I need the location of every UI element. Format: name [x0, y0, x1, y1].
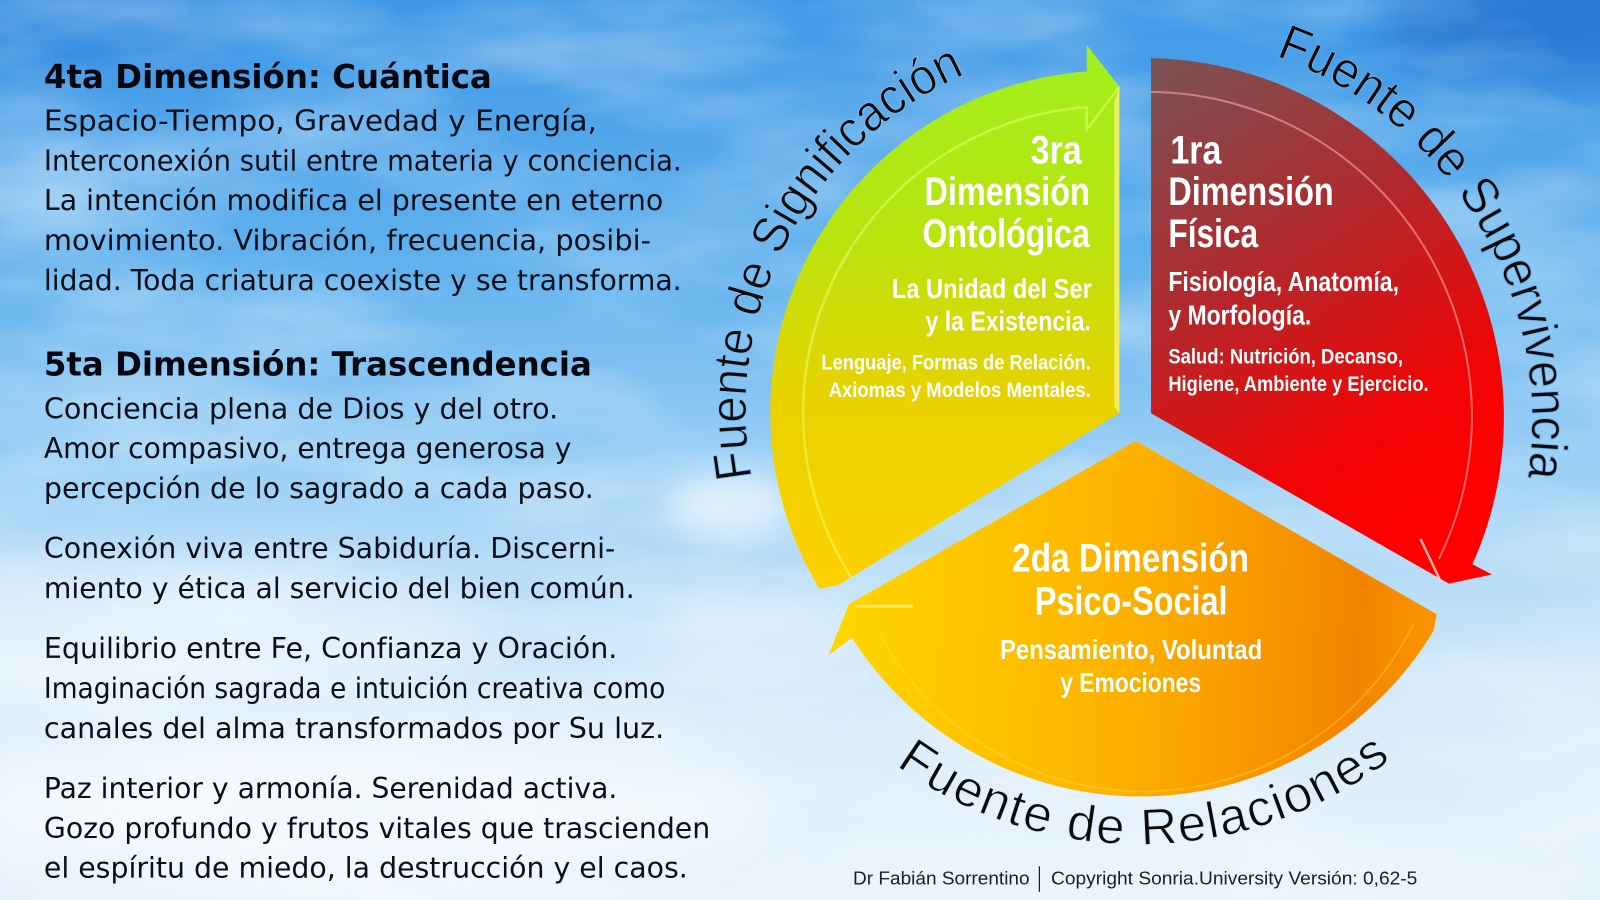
text: 3ra Dimensión Ontológica: Ontológica [922, 212, 1090, 256]
text: 3ra Dimensión Ontológica [821, 128, 1092, 402]
text: paragraph sabiduria: Conexión viva entre Sabiduría. Discerni- [44, 531, 615, 565]
heading: 5ta Dimensión: 5ta Dimensión: Trascendencia [44, 346, 592, 384]
arrow: red segment shape [1151, 58, 1504, 584]
text: 3ra Dimensión Ontológica: Lenguaje, Formas de Relación. [821, 350, 1091, 374]
text: 1ra Dimensión Física: 1ra [1170, 128, 1222, 172]
text: 1ra Dimensión Física: y Morfología. [1168, 299, 1311, 330]
text: 1ra Dimensión Física: Física [1168, 212, 1259, 256]
text: 3ra Dimensión Ontológica: y la Existencia. [926, 306, 1091, 337]
panel: 2da Dimensión orange arrow [829, 441, 1437, 796]
text: description of 4th dimension: La intención modifica el presente en eterno [44, 183, 663, 217]
text: 2da Dimensión Psico-Social: Psico-Social [1035, 579, 1228, 623]
text: paragraph sabiduria [44, 531, 635, 605]
text: description of 4th dimension: lidad. Toda criatura coexiste y se transforma. [44, 263, 682, 297]
text: paragraph conciencia: Amor compasivo, entrega generosa y [44, 431, 572, 465]
arrow: green segment shape [770, 45, 1119, 589]
text: 3ra Dimensión Ontológica: Axiomas y Modelos Mentales. [829, 378, 1091, 402]
arrow inner bevel [855, 605, 913, 608]
text: description of 4th dimension: Interconexión sutil entre materia y conciencia. [44, 143, 682, 177]
heading: 4ta Dimensión: 4ta Dimensión: Cuántica [44, 58, 492, 96]
panel: 1ra Dimensión red arrow [1151, 58, 1504, 584]
text: 2da Dimensión Psico-Social [1000, 536, 1262, 698]
text: 1ra Dimensión Física: Higiene, Ambiente y Ejercicio. [1168, 372, 1429, 396]
text: description of 4th dimension [44, 104, 682, 297]
text: paragraph sabiduria: miento y ética al servicio del bien común. [44, 571, 635, 605]
text: paragraph paz: Gozo profundo y frutos vitales que trascienden [44, 811, 710, 845]
text: paragraph paz: el espíritu de miedo, la destrucción y el caos. [44, 851, 688, 885]
text: 1ra Dimensión Física: Dimensión [1168, 170, 1334, 214]
arrow inner bevel [1151, 92, 1472, 559]
curved label: Fuente de Relaciones: Fuente de Relaciones [900, 740, 1386, 845]
text: 2da Dimensión Psico-Social: 2da Dimensión [1012, 536, 1249, 580]
footer: credits: Copyright Sonria.University Versión: 0,62-5 [1051, 868, 1417, 889]
text: paragraph fe: canales del alma transformados por Su luz. [44, 711, 664, 745]
text: 3ra Dimensión Ontológica: Dimensión [924, 170, 1090, 214]
text: paragraph fe [44, 631, 665, 745]
panel: 3ra Dimensión green arrow [770, 45, 1119, 589]
text: 1ra Dimensión Física [1168, 128, 1429, 396]
curved label: Fuente de Supervivencia: Fuente de Supervivencia [1278, 24, 1569, 478]
text: 3ra Dimensión Ontológica: 3ra [1031, 128, 1082, 172]
text: paragraph paz [44, 771, 710, 885]
arrow inner bevel [803, 87, 1119, 579]
text: 1ra Dimensión Física: Fisiología, Anatomía, [1168, 266, 1399, 297]
text: 1ra Dimensión Física: Salud: Nutrición, Decanso, [1168, 344, 1403, 368]
text: paragraph conciencia [44, 391, 594, 505]
footer: credits [853, 866, 1417, 892]
text: paragraph fe: Imaginación sagrada e intuición creativa como [44, 671, 665, 705]
text: description of 4th dimension: Espacio-Tiempo, Gravedad y Energía, [44, 104, 597, 138]
text: 2da Dimensión Psico-Social: Pensamiento, Voluntad [1000, 634, 1262, 665]
panel: 5ta Dimension text block [44, 346, 710, 885]
panel: 4ta Dimension text block [44, 58, 682, 297]
text: description of 4th dimension: movimiento. Vibración, frecuencia, posibi- [44, 223, 651, 257]
text: paragraph fe: Equilibrio entre Fe, Confianza y Oración. [44, 631, 617, 665]
footer: credits: Dr Fabián Sorrentino [853, 868, 1030, 889]
text: 3ra Dimensión Ontológica: La Unidad del Ser [892, 273, 1092, 304]
text: paragraph paz: Paz interior y armonía. Serenidad activa. [44, 771, 617, 805]
arrow: orange segment shape [829, 441, 1437, 796]
text: 2da Dimensión Psico-Social: y Emociones [1060, 667, 1201, 698]
curved label: Fuente de Significación: Fuente de Significación [712, 52, 963, 480]
text: paragraph conciencia: Conciencia plena de Dios y del otro. [44, 391, 558, 425]
text: paragraph conciencia: percepción de lo sagrado a cada paso. [44, 471, 594, 505]
